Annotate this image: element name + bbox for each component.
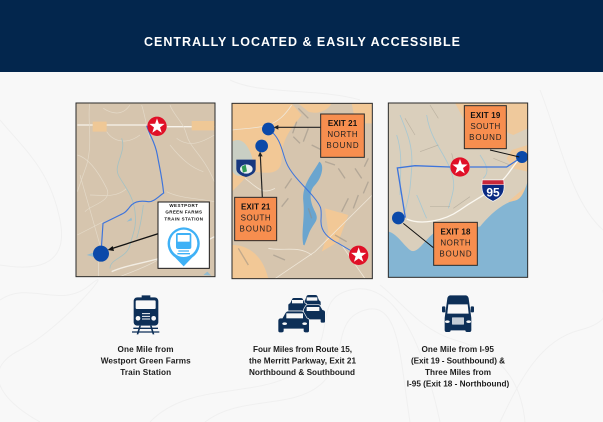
arrow: exit 18	[403, 223, 433, 248]
callout: exit 21 south: BOUND	[239, 225, 272, 234]
title: CENTRALLY LOCATED & EASILY ACCESSIBLE	[144, 35, 460, 49]
panel: Route 15 map	[232, 103, 372, 279]
callout: exit 21 north: NORTH	[327, 130, 358, 139]
callout: train station: TRAIN STATION	[164, 216, 203, 221]
text: train caption	[101, 345, 191, 377]
icon: interstate 95 shield	[482, 180, 504, 201]
icon: train pin	[168, 227, 200, 266]
arrow: exit 19	[490, 150, 519, 157]
callout: exit 19 south	[464, 106, 506, 149]
icon: Merritt Parkway shield	[236, 160, 256, 177]
callout: exit 18 north: NORTH	[440, 239, 471, 248]
callout: train station	[158, 202, 209, 268]
callout: exit 21 south	[235, 197, 277, 241]
arrow: exit 21 north	[274, 125, 321, 130]
callout: train station: WESTPORT	[169, 203, 198, 208]
panel: train station map	[76, 103, 215, 277]
callout: exit 21 north: EXIT 21	[328, 119, 358, 128]
header band	[0, 0, 603, 72]
text: I-95 caption: I-95 (Exit 18 - Northbound)	[407, 379, 510, 388]
icon: train	[132, 295, 159, 334]
exit 21 north marker	[262, 123, 275, 135]
text: train caption: One Mile from	[118, 345, 174, 354]
text: I-95 caption: One Mile from I-95	[421, 345, 494, 354]
callout: exit 18 north: BOUND	[439, 250, 472, 259]
text: I-95 caption: (Exit 19 - Southbound) &	[411, 356, 505, 365]
route line	[101, 126, 164, 254]
exit 19 marker	[516, 151, 528, 163]
callout: exit 19 south: SOUTH	[470, 122, 501, 131]
callout: exit 19 south: BOUND	[469, 133, 502, 142]
text: Route 15 caption: Four Miles from Route 15,	[253, 345, 352, 354]
arrow: exit 21 south	[258, 152, 263, 197]
exit 21 south marker	[255, 140, 268, 152]
train station marker	[93, 246, 109, 262]
text: I-95 caption: Three Miles from	[425, 368, 491, 377]
icon: cars in traffic	[278, 295, 325, 333]
text: I-95 caption	[407, 345, 510, 388]
text: train caption: Train Station	[120, 368, 171, 377]
text: train caption: Westport Green Farms	[101, 356, 191, 365]
callout: exit 18 north	[434, 222, 477, 265]
icon: interstate 95 shield: 95	[486, 185, 500, 199]
callout: exit 21 north: BOUND	[326, 141, 359, 150]
text: Route 15 caption: the Merritt Parkway, Exit 21	[249, 356, 356, 365]
text: Route 15 caption: Northbound & Southbound	[249, 368, 355, 377]
callout: exit 18 north: EXIT 18	[440, 228, 471, 237]
star marker	[147, 117, 167, 136]
arrow to station	[108, 234, 158, 251]
text: Route 15 caption	[249, 345, 356, 377]
route line	[268, 129, 358, 255]
icon: truck	[442, 295, 474, 332]
highway 95 line	[407, 160, 518, 222]
callout: train station: GREEN FARMS	[165, 210, 202, 215]
callout: exit 21 north	[321, 114, 364, 157]
exit 18 marker	[392, 212, 405, 224]
star marker	[349, 246, 368, 265]
route line	[397, 157, 522, 218]
callout: exit 21 south: EXIT 21	[241, 203, 271, 212]
callout: exit 21 south: SOUTH	[241, 214, 271, 223]
star marker	[450, 157, 470, 177]
callout: exit 19 south: EXIT 19	[470, 111, 501, 120]
panel: I-95 map	[388, 103, 528, 277]
